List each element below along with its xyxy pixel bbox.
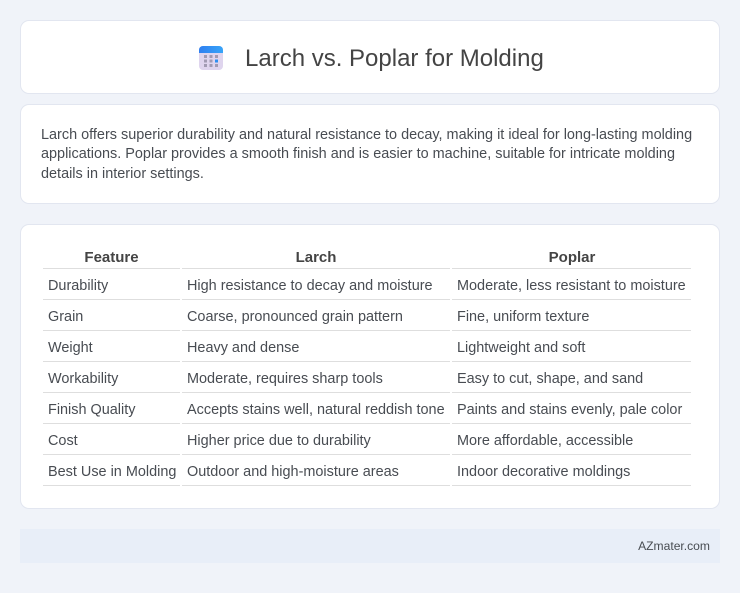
summary card bbox=[20, 104, 720, 204]
table rows: More affordable, accessible bbox=[457, 433, 633, 449]
footer bar bbox=[20, 529, 720, 563]
table rows: Best Use in Molding bbox=[48, 464, 176, 480]
summary text: applications. Poplar provides a smooth finish and is easier to machine, suitable for intricate molding bbox=[41, 146, 675, 162]
title: Larch vs. Poplar for Molding bbox=[245, 45, 544, 72]
table rows: Workability bbox=[48, 371, 118, 387]
table rows: Moderate, requires sharp tools bbox=[187, 371, 383, 387]
summary text: details in interior settings. bbox=[41, 166, 204, 182]
title card bbox=[20, 20, 720, 94]
table rows: Heavy and dense bbox=[187, 340, 299, 356]
table rows bbox=[43, 268, 691, 486]
table header: Feature bbox=[84, 249, 139, 266]
footer source text: AZmater.com bbox=[638, 539, 710, 553]
table rows: Weight bbox=[48, 340, 93, 356]
table rows: Coarse, pronounced grain pattern bbox=[187, 309, 403, 325]
table header bbox=[84, 249, 596, 266]
table rows: Accepts stains well, natural reddish tone bbox=[187, 402, 445, 418]
table rows: Higher price due to durability bbox=[187, 433, 371, 449]
table rows: Outdoor and high-moisture areas bbox=[187, 464, 399, 480]
table header: Poplar bbox=[549, 249, 595, 266]
table rows: High resistance to decay and moisture bbox=[187, 278, 433, 294]
comparison table card bbox=[20, 224, 720, 509]
table rows: Easy to cut, shape, and sand bbox=[457, 371, 643, 387]
table rows: Fine, uniform texture bbox=[457, 309, 589, 325]
icon: calendar bbox=[199, 46, 223, 70]
summary text: Larch offers superior durability and natural resistance to decay, making it ideal for long-lasting molding bbox=[41, 127, 692, 143]
table rows: Cost bbox=[48, 433, 78, 449]
table rows: Lightweight and soft bbox=[457, 340, 585, 356]
table rows: Moderate, less resistant to moisture bbox=[457, 278, 686, 294]
table rows: Paints and stains evenly, pale color bbox=[457, 402, 682, 418]
table header: Larch bbox=[296, 249, 336, 266]
summary text bbox=[41, 127, 692, 182]
table rows: Grain bbox=[48, 309, 83, 325]
table rows: Finish Quality bbox=[48, 402, 135, 418]
table rows: Durability bbox=[48, 278, 108, 294]
table rows: Indoor decorative moldings bbox=[457, 464, 630, 480]
